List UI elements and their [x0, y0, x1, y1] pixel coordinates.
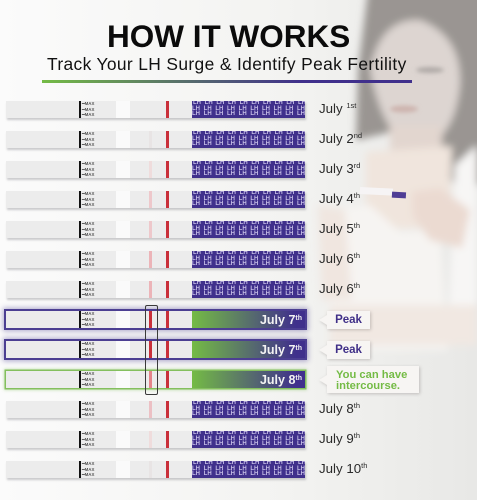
strip row 11	[6, 401, 305, 418]
date 2: July 2nd	[319, 131, 362, 146]
strip row 3: ━MAX ━MAX ━MAX	[82, 161, 94, 177]
strip row 12	[6, 431, 305, 448]
date 11: July 8th	[319, 401, 360, 416]
strip row 5	[6, 221, 305, 238]
date 6: July 6th	[319, 251, 360, 266]
strip row 8 highlighted peak	[6, 311, 305, 328]
strip row 9 highlighted peak: ━MAX ━MAX ━MAX	[82, 341, 94, 357]
callout: peak 1	[327, 311, 370, 329]
date 13: July 10th	[319, 461, 367, 476]
strip row 7: ━MAX ━MAX ━MAX	[82, 281, 94, 297]
callout: peak 2: Peak	[335, 344, 362, 356]
strip row 12: ━MAX ━MAX ━MAX	[82, 431, 94, 447]
callout: peak 1: Peak	[335, 314, 362, 326]
strip row 1: ━MAX ━MAX ━MAX	[82, 101, 94, 117]
date 12: July 9th	[319, 431, 360, 446]
date 1: July 1st	[319, 101, 356, 116]
subtitle: Track Your LH Surge & Identify Peak Fertility	[47, 54, 407, 74]
date 3: July 3rd	[319, 161, 360, 176]
date 7: July 6th	[319, 281, 360, 296]
strip row 8 highlighted peak: ━MAX ━MAX ━MAX	[82, 311, 94, 327]
strip row 2: ━MAX ━MAX ━MAX	[82, 131, 94, 147]
strip row 4	[6, 191, 305, 208]
strip row 10 highlighted green	[6, 371, 305, 388]
subtitle underline gradient	[42, 80, 412, 83]
callout: you can have intercourse: You can have	[336, 369, 407, 381]
date 10: July 8th	[260, 373, 302, 387]
callout: you can have intercourse: intercourse.	[336, 380, 400, 392]
strip row 6: ━MAX ━MAX ━MAX	[82, 251, 94, 267]
callout: you can have intercourse	[327, 366, 419, 393]
strip row 13: ━MAX ━MAX ━MAX	[82, 461, 94, 477]
date 4: July 4th	[319, 191, 360, 206]
strip row 2	[6, 131, 305, 148]
strip row 5: ━MAX ━MAX ━MAX	[82, 221, 94, 237]
strip row 6	[6, 251, 305, 268]
strip row 7	[6, 281, 305, 298]
title: HOW IT WORKS	[107, 18, 350, 54]
strip row 13	[6, 461, 305, 478]
date 5: July 5th	[319, 221, 360, 236]
strip row 10 highlighted green: ━MAX ━MAX ━MAX	[82, 371, 94, 387]
strip row 11: ━MAX ━MAX ━MAX	[82, 401, 94, 417]
strip row 1	[6, 101, 305, 118]
strip row 4: ━MAX ━MAX ━MAX	[82, 191, 94, 207]
date 9: July 7th	[260, 343, 302, 357]
date 8: July 7th	[260, 313, 302, 327]
strip row 3	[6, 161, 305, 178]
strip row 9 highlighted peak	[6, 341, 305, 358]
peak line highlight box	[145, 305, 158, 395]
callout: peak 2	[327, 341, 370, 359]
